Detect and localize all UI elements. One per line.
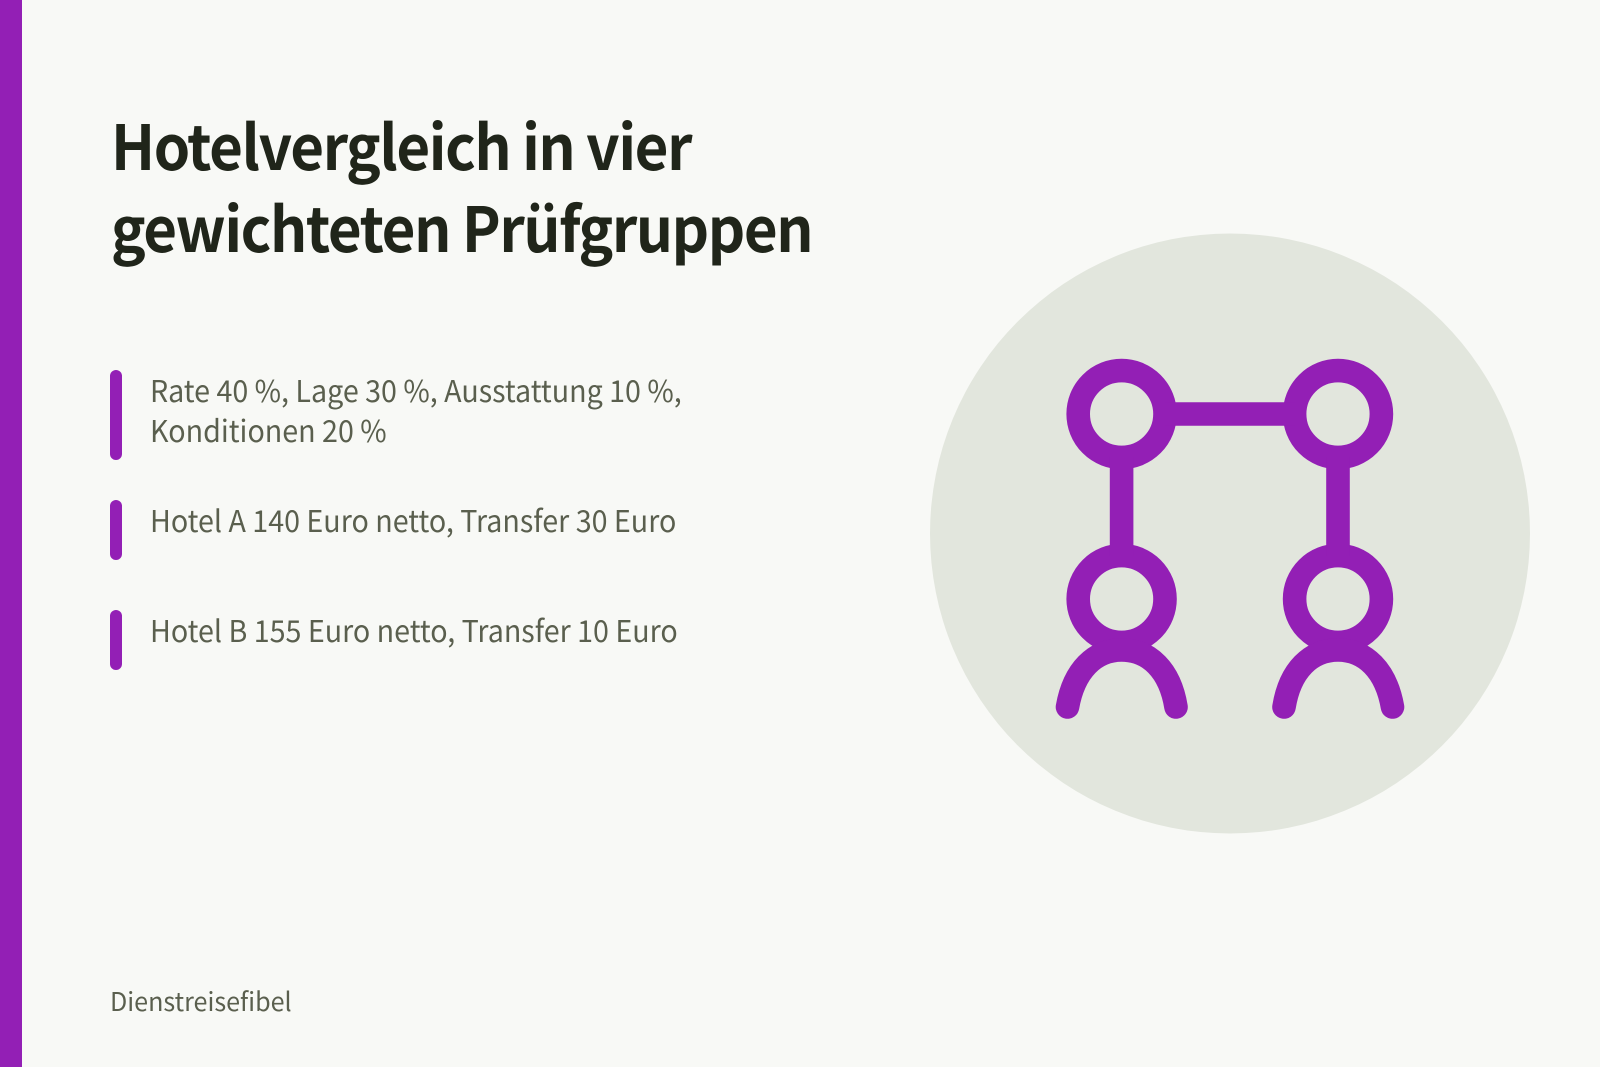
title: Hotelvergleich in vier	[110, 98, 691, 188]
bullet 3 marker	[110, 610, 122, 670]
title	[110, 98, 812, 270]
left accent stripe	[0, 0, 22, 1067]
bullet 1 text: Konditionen 20 %	[150, 407, 387, 451]
bullet 1 text: Rate 40 %, Lage 30 %, Ausstattung 10 %,	[150, 367, 682, 411]
bullet 2 marker	[110, 500, 122, 560]
bullet 2 text: Hotel A 140 Euro netto, Transfer 30 Euro	[150, 497, 676, 541]
bullet list	[110, 367, 682, 670]
bullet 3 text: Hotel B 155 Euro netto, Transfer 10 Euro	[150, 607, 678, 651]
title: gewichteten Prüfgruppen	[110, 180, 812, 270]
icon: connected people	[1068, 371, 1392, 707]
footer source: Dienstreisefibel	[110, 982, 292, 1019]
bullet 1 marker	[110, 370, 122, 460]
bullet 1 text	[150, 367, 682, 451]
background circle	[930, 234, 1530, 834]
